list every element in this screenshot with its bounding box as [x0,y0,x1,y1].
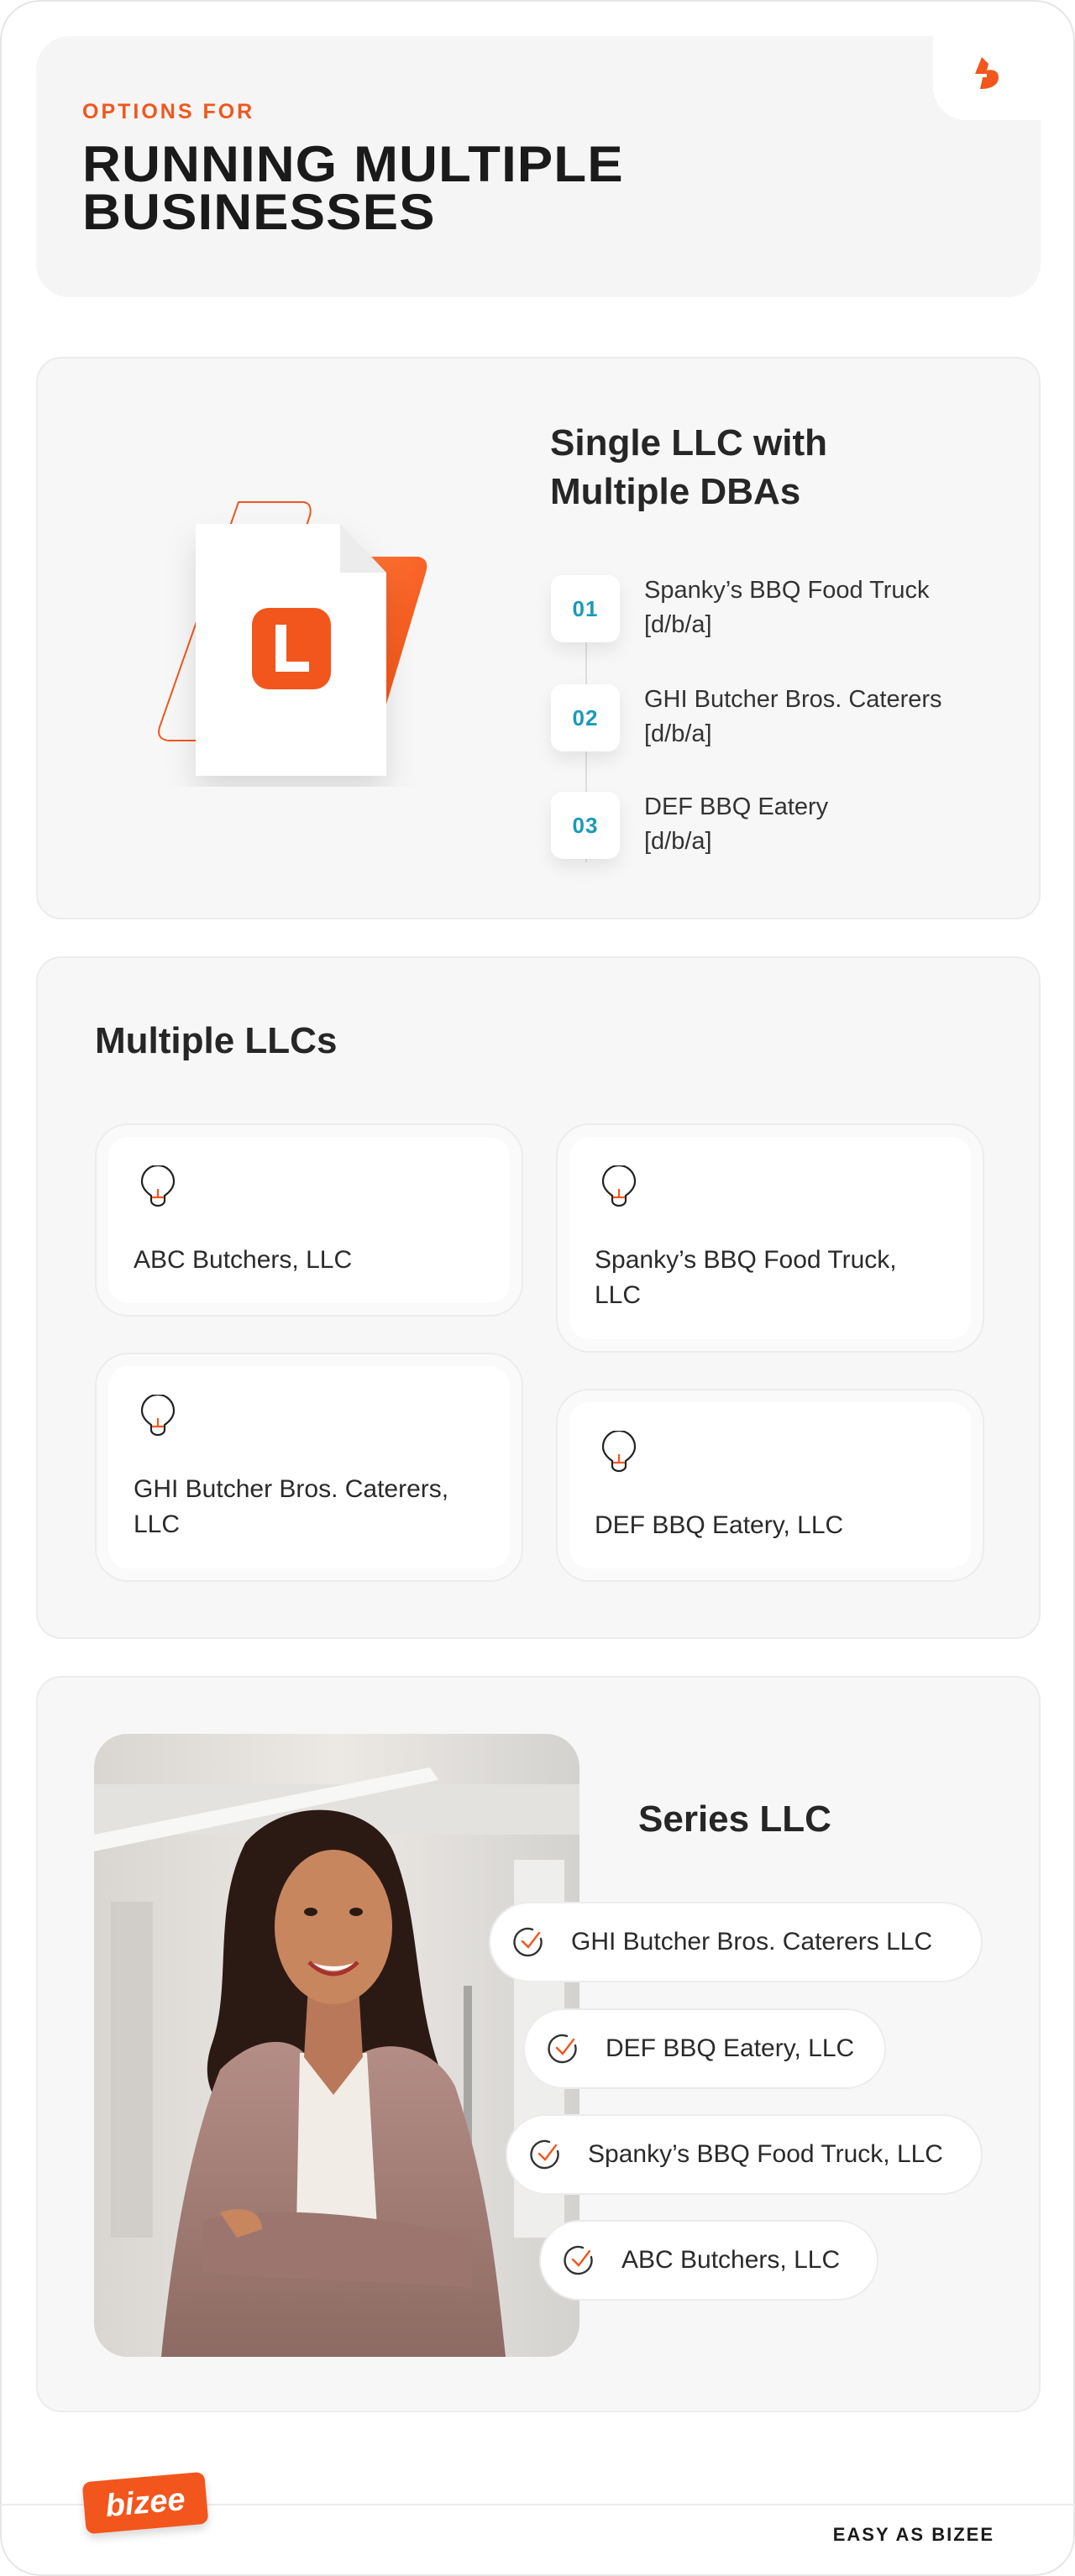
connector line [585,610,587,862]
panel: multiple LLCs [36,956,1041,1639]
eyebrow: options for: OPTIONS FOR [82,100,254,123]
pill: DEF: DEF BBQ Eatery, LLC [606,2034,854,2062]
item 03 [549,792,828,868]
item 02: [d/b/a] [644,720,712,747]
panel: series LLC [36,1676,1041,2412]
item 03: DEF BBQ Eatery [644,793,828,820]
card: GHI Butcher [95,1353,523,1582]
hair [207,1810,438,2092]
title: BUSINESSES [82,184,436,240]
card: DEF BBQ: DEF BBQ Eatery, LLC [595,1511,843,1539]
pill: Spanky's: Spanky’s BBQ Food Truck, LLC [588,2140,943,2168]
illustration: document [158,501,427,787]
notch with logo [933,36,1041,120]
heading [550,422,827,512]
pill: GHI: GHI Butcher Bros. Caterers LLC [571,1928,932,1956]
shirt [296,2053,376,2219]
item 01: [d/b/a] [644,611,712,638]
pill: Spanky's [506,2114,983,2195]
heading: Multiple LLCs [95,1020,337,1061]
pill: DEF [523,2008,886,2089]
panel: single LLC with multiple DBAs [36,357,1041,919]
jacket [161,2042,506,2357]
pill: ABC: ABC Butchers, LLC [621,2246,840,2274]
icon: bizee mark [975,57,999,89]
item 02: 02 [573,705,598,730]
card: GHI Butcher: LLC [134,1511,180,1538]
neck [304,1986,363,2095]
pill: ABC [539,2220,878,2301]
item 03: 03 [573,813,598,838]
footer logo: bizee: bizee [104,2481,186,2524]
pill: GHI [489,1902,983,1982]
title [82,136,624,240]
item 01: Spanky’s BBQ Food Truck [644,577,930,604]
item 02: GHI Butcher Bros. Caterers [644,686,942,713]
heading: Multiple DBAs [550,471,800,512]
footer tagline: EASY AS BIZEE [833,2524,994,2545]
item 03: [d/b/a] [644,828,712,855]
heading: Single LLC with [550,422,827,463]
card: DEF BBQ [556,1389,984,1582]
card: GHI Butcher: GHI Butcher Bros. Caterers, [134,1475,448,1503]
face [275,1850,392,2004]
card: ABC Butchers [95,1123,523,1317]
card: Spanky's: Spanky’s BBQ Food Truck, [595,1246,897,1274]
header panel [36,36,1041,297]
card: Spanky's [556,1123,984,1353]
item 01 [549,577,930,652]
title: RUNNING MULTIPLE [82,136,624,192]
crossed arms [296,2212,380,2271]
footer logo: bizee [82,2472,208,2534]
photo: businesswoman [94,1734,579,2357]
item 02 [549,684,942,761]
item 01: 01 [573,596,598,621]
heading: Series LLC [638,1798,831,1840]
card: ABC Butchers: ABC Butchers, LLC [134,1246,352,1274]
card: Spanky's: LLC [595,1281,641,1309]
